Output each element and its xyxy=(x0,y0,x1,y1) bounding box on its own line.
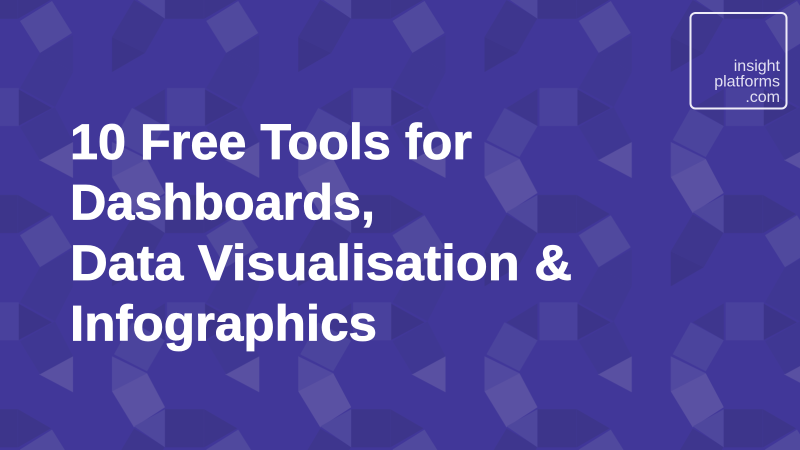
title: Data Visualisation & xyxy=(70,235,572,291)
logo: insight platforms: insight xyxy=(734,58,781,75)
title xyxy=(70,114,572,352)
title: Infographics xyxy=(70,296,377,352)
logo: insight platforms xyxy=(690,13,786,108)
logo: insight platforms: platforms xyxy=(714,74,780,90)
title: 10 Free Tools for xyxy=(70,114,472,170)
logo: insight platforms: .com xyxy=(745,89,780,106)
title: Dashboards, xyxy=(70,174,375,230)
